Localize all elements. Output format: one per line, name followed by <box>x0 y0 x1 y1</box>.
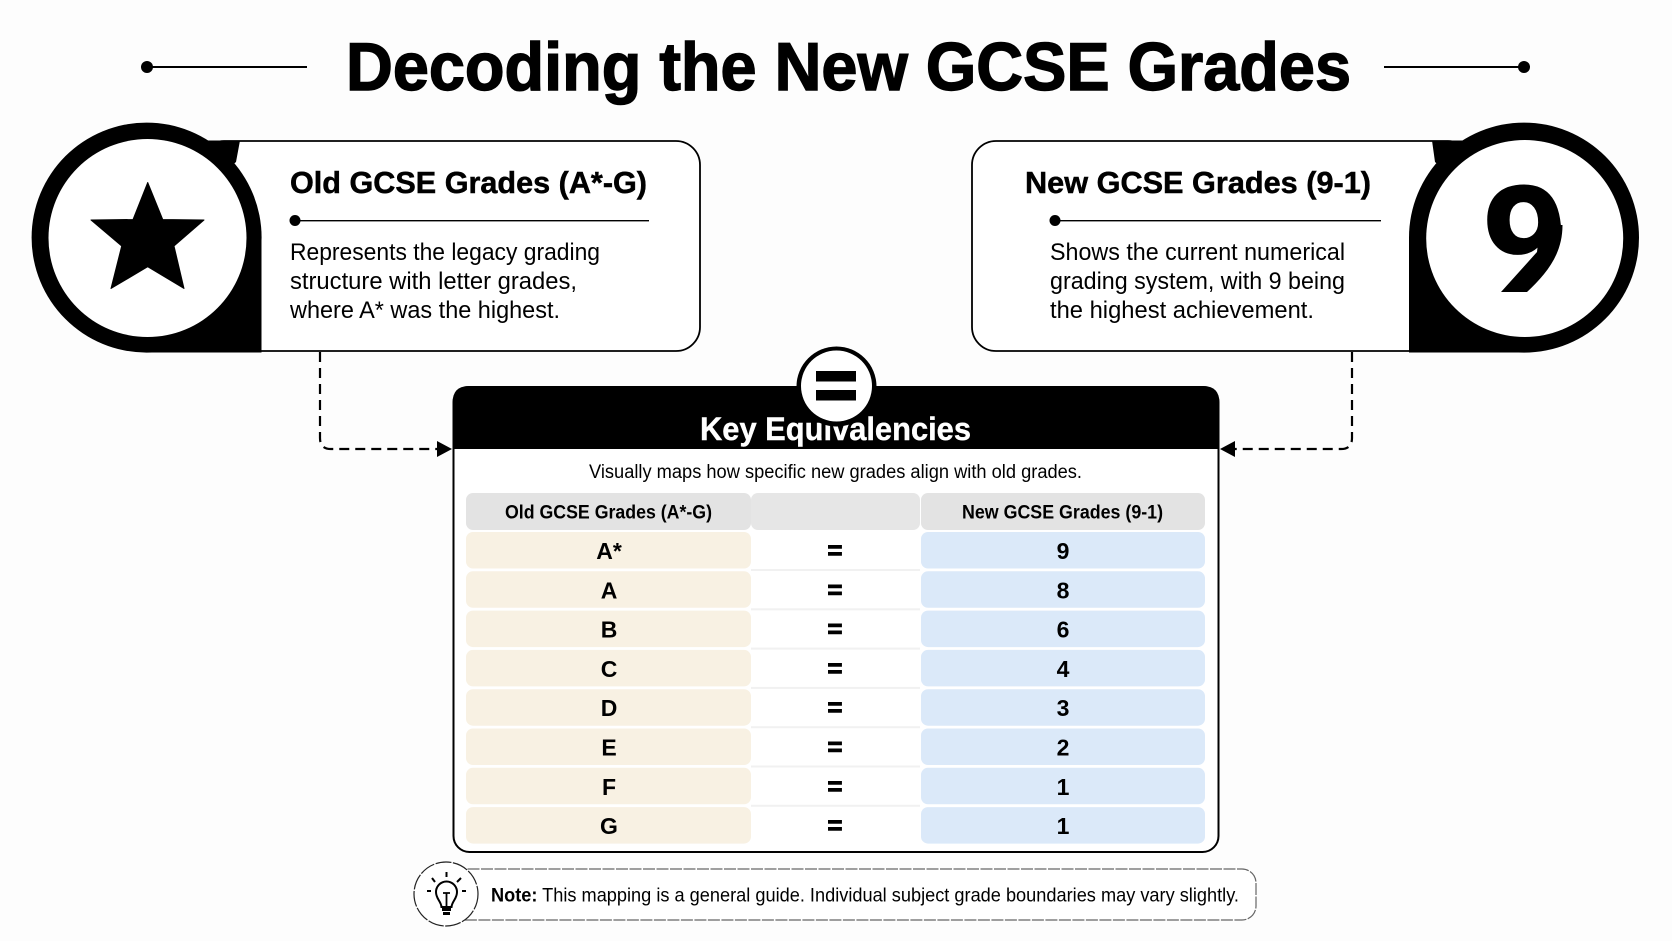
text: old grades description: where A* was the highest. <box>289 297 560 324</box>
row: D equals 3 <box>466 689 1205 728</box>
text: new grades description: grading system, with 9 being <box>1050 268 1345 295</box>
row: E equals 2: E <box>601 734 617 760</box>
panel: new GCSE grades <box>972 123 1639 353</box>
text: new grades description: the highest achievement. <box>1050 297 1314 324</box>
row: A star equals 9 <box>466 532 1205 571</box>
title: Decoding the New GCSE Grades <box>346 29 1351 105</box>
text: old grades description: structure with letter grades, <box>290 268 577 295</box>
icon: lightbulb <box>414 862 478 926</box>
row: E equals 2 <box>466 728 1205 768</box>
row: B equals 6: = <box>827 614 843 644</box>
row: D equals 3: D <box>601 695 617 721</box>
text: new grades description <box>1050 239 1345 324</box>
row: A star equals 9: = <box>827 535 843 565</box>
row: A equals 8: 8 <box>1057 577 1070 603</box>
heading: key equivalencies: Key Equivalencies <box>700 411 971 447</box>
icon: number nine badge: 9 <box>1483 154 1566 322</box>
row: A equals 8: A <box>601 577 617 603</box>
icon: equals badge <box>796 346 876 426</box>
row: A star equals 9: A* <box>596 538 622 564</box>
row: G equals 1 <box>466 807 1205 844</box>
connector arrow: old grades to table <box>320 352 452 457</box>
row: G equals 1: = <box>827 810 843 840</box>
connector arrow: new grades to table <box>1220 352 1352 457</box>
table header row <box>466 493 1205 530</box>
row: F equals 1: F <box>602 774 616 800</box>
row: C equals 4: C <box>601 656 617 682</box>
row: B equals 6: 6 <box>1057 617 1069 643</box>
row: F equals 1: = <box>827 771 843 801</box>
row: E equals 2: = <box>827 732 843 762</box>
callout: note <box>414 862 1256 926</box>
table header row: Old GCSE Grades (A*-G) <box>505 502 712 524</box>
table: grade mapping <box>466 493 1205 844</box>
row: B equals 6: B <box>601 617 617 643</box>
text: note: Note: This mapping is a general guide. Individual subject grade boundaries may vary slightly. <box>491 884 1239 906</box>
text: new grades description: Shows the current numerical <box>1050 239 1345 266</box>
row: C equals 4: = <box>827 653 843 683</box>
heading: old grades: Old GCSE Grades (A*-G) <box>290 165 647 200</box>
panel: old GCSE grades <box>32 123 700 353</box>
divider: old grades <box>290 215 649 226</box>
row: B equals 6 <box>466 611 1205 650</box>
text: old grades description: Represents the legacy grading <box>290 239 600 266</box>
heading: new grades: New GCSE Grades (9-1) <box>1025 165 1371 200</box>
row: D equals 3: 3 <box>1057 695 1069 721</box>
icon: number nine badge <box>1409 123 1639 353</box>
row: D equals 3: = <box>827 692 843 722</box>
row: C equals 4: 4 <box>1057 656 1070 682</box>
text: old grades description <box>289 239 600 324</box>
row: A equals 8: = <box>827 574 843 604</box>
table header row: New GCSE Grades (9-1) <box>962 502 1163 524</box>
divider: new grades <box>1050 215 1381 226</box>
icon: star badge <box>32 123 262 353</box>
panel header bar <box>452 386 1220 449</box>
row: G equals 1: G <box>600 813 618 839</box>
row: F equals 1: 1 <box>1057 774 1070 800</box>
text: table subtitle: Visually maps how specific new grades align with old grades. <box>589 462 1082 483</box>
row: A equals 8 <box>466 571 1205 610</box>
row: C equals 4 <box>466 650 1205 689</box>
row: A star equals 9: 9 <box>1057 538 1069 564</box>
row: F equals 1 <box>466 768 1205 807</box>
panel: key equivalencies <box>452 346 1220 852</box>
row: E equals 2: 2 <box>1057 734 1069 760</box>
row: G equals 1: 1 <box>1057 813 1070 839</box>
